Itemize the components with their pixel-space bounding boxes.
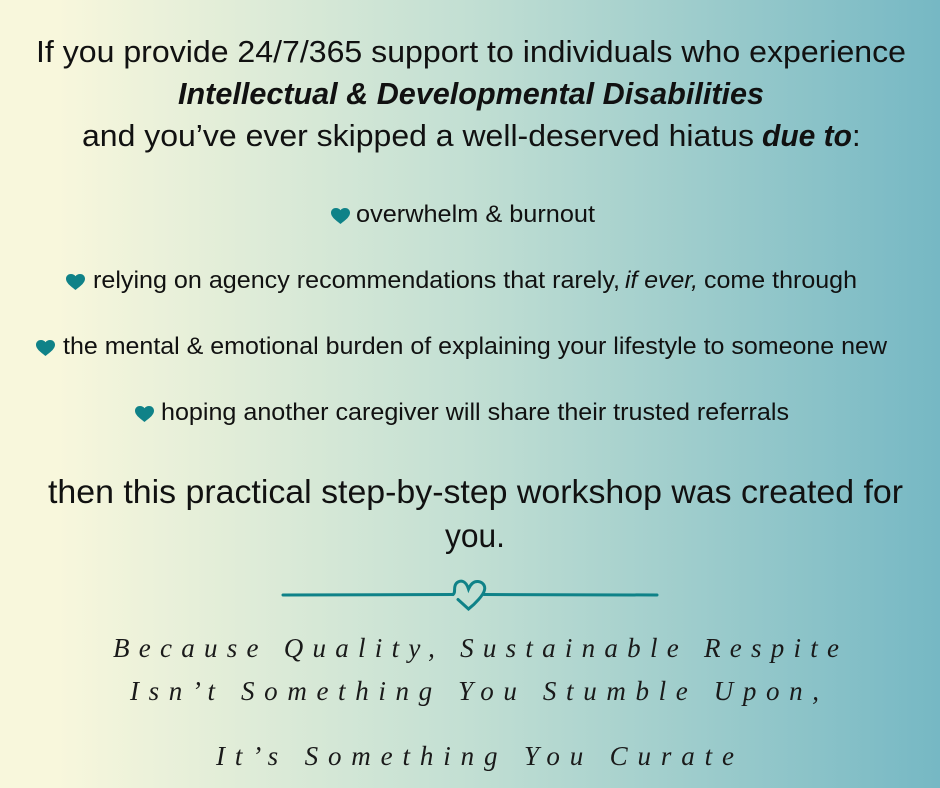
heading: If you provide 24/7/365 support to individuals who experience — [36, 34, 906, 69]
script tagline: Isn’t Something You Stumble Upon, — [129, 676, 819, 706]
bullet: agency recommendations: come through — [704, 267, 857, 294]
bullet: trusted referrals: hoping another caregiver will share their trusted referrals — [161, 399, 789, 426]
divider with heart — [283, 581, 657, 609]
script tagline: Because Quality, Sustainable Respite — [113, 633, 839, 663]
bullet: agency recommendations — [66, 267, 857, 294]
heading: Intellectual & Developmental Disabilities — [178, 76, 764, 111]
bullet: mental and emotional burden: the mental & emotional burden of explaining your lifestyle to someone new — [63, 333, 888, 360]
closing statement: then this practical step-by-step workshop was created for — [48, 473, 903, 510]
bullet: agency recommendations: if ever, — [625, 267, 698, 294]
heading: and you’ve ever skipped a well-deserved hiatus — [82, 118, 754, 153]
bullet: agency recommendations: relying on agency recommendations that rarely, — [93, 267, 620, 294]
script tagline: It’s Something You Curate — [215, 741, 734, 771]
closing statement — [48, 473, 903, 554]
heading: : — [852, 118, 861, 153]
bullet: overwhelm: overwhelm & burnout — [356, 201, 595, 228]
script tagline — [113, 633, 839, 771]
bullet list — [36, 201, 888, 426]
heading — [36, 34, 906, 153]
closing statement: you. — [445, 517, 505, 554]
heading: due to — [762, 118, 852, 153]
